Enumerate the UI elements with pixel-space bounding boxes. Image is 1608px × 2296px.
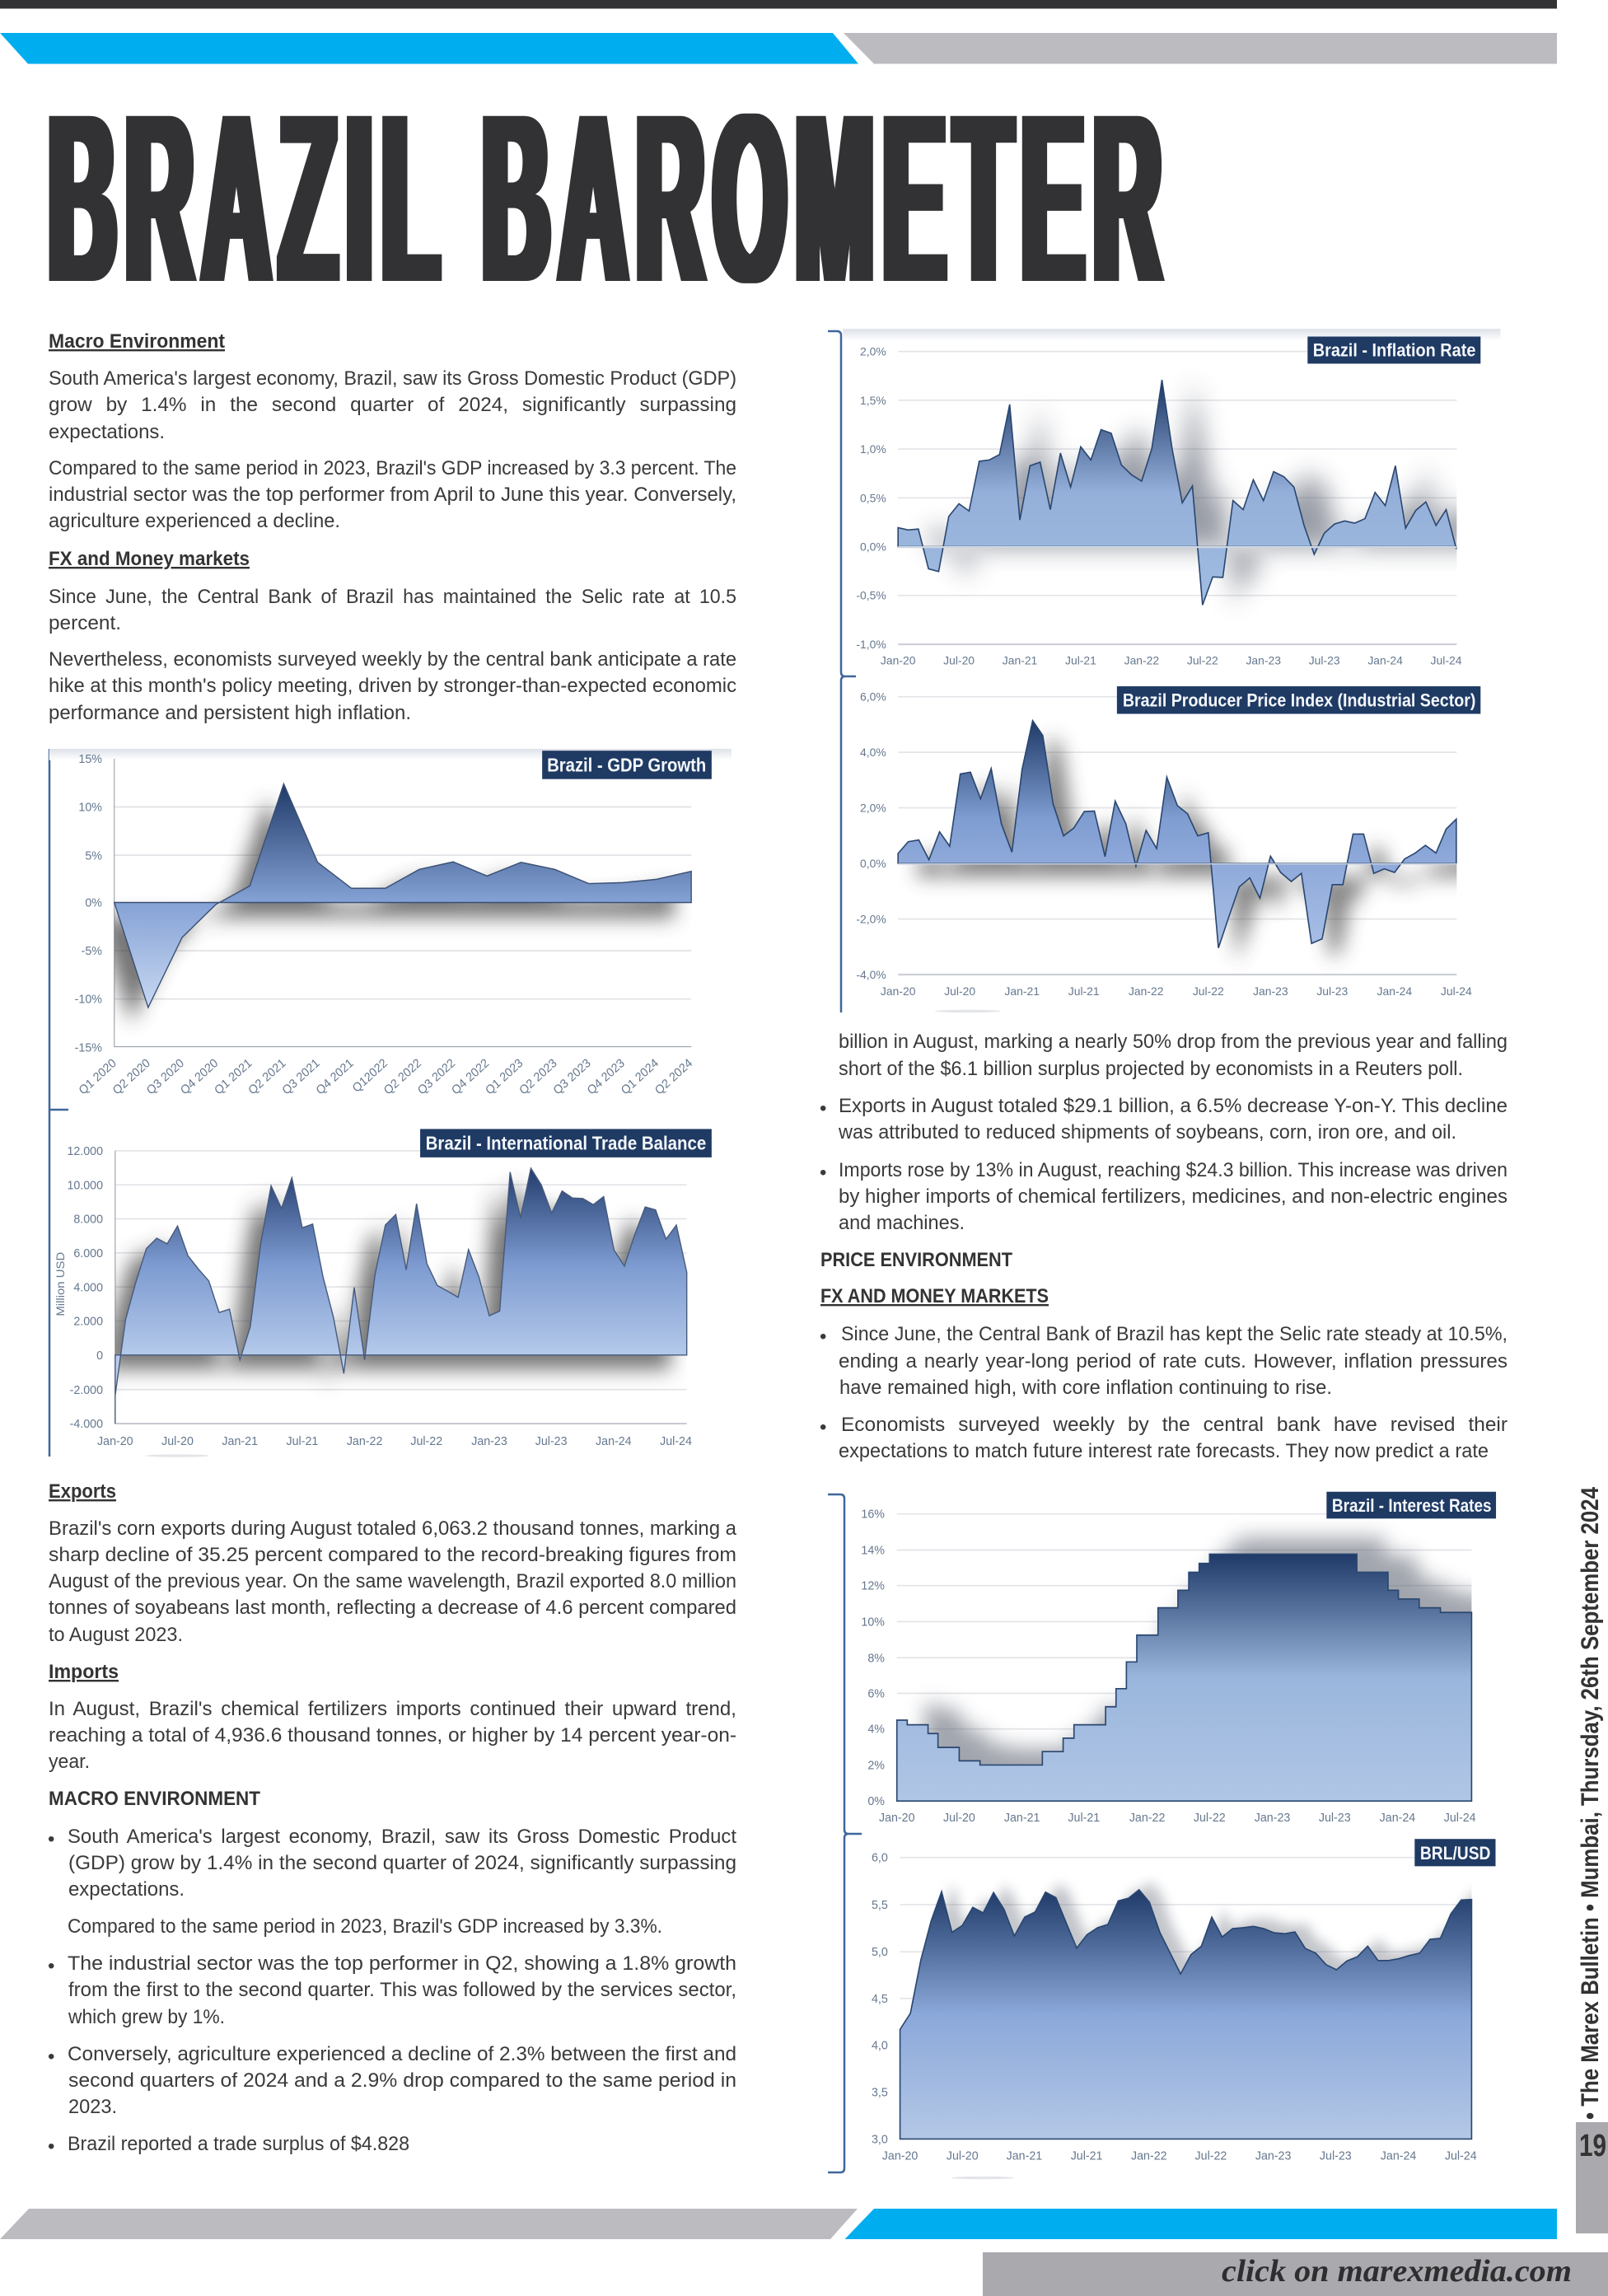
trade y axis labels: 0	[96, 1349, 103, 1363]
BRL x axis labels: Jul-21	[1071, 2150, 1102, 2163]
trade y axis title: Million USD	[54, 1252, 68, 1316]
GDP x axis labels	[77, 1057, 695, 1097]
inflation x axis labels: Jan-23	[1246, 654, 1281, 667]
trade x axis labels: Jan-24	[596, 1435, 632, 1448]
trade y axis labels: -2.000	[70, 1384, 103, 1397]
trade x axis labels: Jan-20	[97, 1435, 133, 1448]
right column text	[820, 1031, 1508, 1462]
GDP x axis labels: Q4 2021	[314, 1057, 357, 1097]
GDP y axis labels: -10%	[75, 993, 102, 1007]
interest x axis labels: Jan-23	[1255, 1812, 1290, 1825]
interest title badge: Brazil - Interest Rates	[1332, 1495, 1492, 1516]
bullet: selic rate	[820, 1323, 1508, 1399]
bullet: agriculture: 2023.	[68, 2096, 117, 2118]
bullet: exports: Exports in August totaled $29.1 billion, a 6.5% decrease Y-on-Y. This decline	[839, 1095, 1508, 1117]
heading: exports: Exports	[49, 1480, 116, 1503]
GDP x axis labels: Q3 2021	[280, 1057, 322, 1097]
paragraph: GDP growth: South America's largest economy, Brazil, saw its Gross Domestic Product (GDP)	[49, 367, 736, 390]
bullet: selic rate: have remained high, with core inflation continuing to rise.	[839, 1377, 1332, 1399]
paragraph: trade surplus continued: short of the $6.1 billion surplus projected by economists in a Reuters poll.	[839, 1058, 1463, 1080]
BRL title badge: BRL/USD	[1420, 1843, 1490, 1863]
bullet: selic rate: Since June, the Central Bank of Brazil has kept the Selic rate steady at 10.5%,	[841, 1323, 1508, 1345]
interest y axis labels: 14%	[861, 1544, 885, 1558]
bullet: industrial sector	[48, 1952, 736, 2028]
paragraph: exports: sharp decline of 35.25 percent compared to the record-breaking figures from	[49, 1544, 736, 1566]
interest y axis labels	[861, 1508, 885, 1808]
bullet: agriculture: •	[48, 2046, 54, 2068]
page number tab	[1576, 2122, 1608, 2233]
BRL x axis labels	[882, 2150, 1477, 2163]
paragraph: sector comparison: industrial sector was the top performer from April to June this year. Conversely,	[49, 484, 736, 506]
bullet: exports	[820, 1095, 1508, 1143]
paragraph: selic rate: percent.	[49, 612, 121, 634]
PPI y axis labels	[856, 690, 886, 981]
inflation x axis labels: Jul-22	[1187, 654, 1218, 667]
inflation x axis labels: Jul-20	[943, 654, 975, 667]
chart: inflation rate	[843, 329, 1500, 667]
bullet: industrial sector: which grew by 1%.	[68, 2006, 225, 2028]
paragraph: exports: Brazil's corn exports during August totaled 6,063.2 thousand tonnes, marking a	[49, 1517, 737, 1540]
trade area series	[115, 1168, 687, 1396]
BRL x axis labels: Jul-20	[947, 2150, 979, 2163]
paragraph: imports: year.	[49, 1751, 90, 1773]
bullet: economists: Economists surveyed weekly by the central bank have revised their	[841, 1414, 1508, 1436]
interest x axis labels: Jul-20	[943, 1812, 975, 1825]
side issue line: • The Marex Bulletin • Mumbai, Thursday, 26th September 2024	[1577, 1487, 1604, 2120]
BRL x axis labels: Jul-24	[1445, 2150, 1477, 2163]
BRL title badge	[1414, 1839, 1495, 1866]
interest x axis labels: Jul-24	[1444, 1812, 1476, 1825]
bullet: selic rate: ending a nearly year-long period of rate cuts. However, inflation pressures	[839, 1350, 1508, 1372]
interest x axis labels: Jan-24	[1380, 1812, 1415, 1825]
chart: international trade balance	[54, 1129, 712, 1457]
heading: FX and money markets: FX and Money markets	[49, 548, 250, 570]
BRL x axis labels: Jan-24	[1381, 2150, 1416, 2163]
interest x axis labels	[879, 1812, 1476, 1825]
bullet: GDP growth: expectations.	[68, 1878, 185, 1901]
trade x axis labels: Jul-24	[660, 1435, 692, 1448]
PPI y axis labels: 0,0%	[860, 857, 886, 870]
PPI area series	[898, 721, 1456, 948]
PPI x axis labels: Jan-24	[1377, 984, 1412, 998]
inflation y axis labels: 0,5%	[860, 491, 886, 504]
GDP x axis labels: Q2 2024	[652, 1057, 695, 1097]
inflation x axis labels: Jan-20	[881, 654, 916, 667]
GDP x axis labels: Q12022	[350, 1057, 390, 1096]
PPI x axis labels: Jan-21	[1004, 984, 1040, 998]
top grey ribbon	[844, 33, 1557, 64]
bullet: trade surplus: •	[48, 2135, 54, 2158]
trade y axis labels: 4.000	[73, 1281, 103, 1294]
paragraph: rate hike expectation	[49, 648, 736, 724]
GDP x axis labels: Q2 2023	[517, 1057, 559, 1097]
PPI y axis labels: 4,0%	[860, 746, 886, 759]
GDP y axis labels: 0%	[85, 896, 102, 910]
PPI y axis labels: 6,0%	[860, 690, 886, 704]
paragraph: GDP growth: grow by 1.4% in the second quarter of 2024, significantly surpassing	[49, 394, 736, 416]
inflation x axis labels: Jan-21	[1003, 654, 1037, 667]
trade y axis labels: 2.000	[73, 1315, 103, 1329]
PPI x axis labels: Jan-20	[881, 984, 916, 998]
PPI y axis labels: -4,0%	[856, 968, 886, 981]
bullet: imports: by higher imports of chemical fertilizers, medicines, and non-electric engines	[839, 1185, 1508, 1208]
trade x axis labels: Jan-22	[347, 1435, 382, 1448]
GDP y axis labels: -15%	[75, 1041, 102, 1054]
paragraph: sector comparison: Compared to the same period in 2023, Brazil's GDP increased by 3.3 percent. The	[49, 457, 736, 479]
inflation x axis labels: Jan-22	[1124, 654, 1159, 667]
bullet: exports: •	[820, 1097, 826, 1120]
heading: macro environment: Macro Environment	[49, 330, 225, 353]
paragraph: rate hike expectation: performance and persistent high inflation.	[49, 702, 411, 724]
PPI x axis labels: Jul-22	[1193, 984, 1224, 998]
BRL x axis labels: Jan-20	[882, 2150, 918, 2163]
trade y axis labels: 10.000	[67, 1179, 103, 1192]
BRL y axis labels: 5,5	[872, 1899, 888, 1912]
trade x axis labels: Jan-21	[222, 1435, 258, 1448]
top blue ribbon	[0, 33, 858, 64]
paragraph: GDP growth: expectations.	[49, 421, 165, 443]
GDP x axis labels: Q1 2021	[213, 1057, 255, 1097]
trade x axis labels: Jul-22	[410, 1435, 442, 1448]
GDP x axis labels: Q3 2020	[144, 1057, 187, 1097]
BRL y axis labels: 3,0	[872, 2133, 888, 2147]
paragraph: rate hike expectation: Nevertheless, economists surveyed weekly by the central bank anticipate a rate	[49, 648, 736, 671]
interest y axis labels: 4%	[867, 1723, 885, 1737]
paragraph: GDP growth	[49, 367, 736, 443]
paragraph: trade surplus continued: billion in August, marking a nearly 50% drop from the previous year and falling	[839, 1031, 1508, 1053]
BRL y axis labels	[872, 1852, 888, 2147]
BRL y axis labels: 4,5	[872, 1993, 888, 2006]
interest y axis labels: 6%	[867, 1687, 885, 1701]
footer link bar: click on marexmedia.com	[1222, 2254, 1572, 2289]
paragraph: rate hike expectation: hike at this month's policy meeting, driven by stronger-than-expected economic	[49, 675, 736, 697]
paragraph: exports	[49, 1517, 737, 1646]
footer link bar	[983, 2252, 1608, 2296]
trade y axis labels	[67, 1145, 103, 1431]
interest area series	[897, 1555, 1471, 1801]
interest y axis labels: 10%	[861, 1616, 885, 1630]
interest y axis labels: 12%	[861, 1580, 885, 1593]
interest x axis labels: Jul-23	[1319, 1812, 1351, 1825]
interest x axis labels: Jan-20	[879, 1812, 915, 1825]
BRL y axis labels: 3,5	[872, 2086, 888, 2099]
bullet: imports	[820, 1159, 1508, 1234]
bullet: industrial sector: The industrial sector was the top performer in Q2, showing a 1.8% growth	[68, 1952, 736, 1975]
PPI x axis labels: Jan-22	[1129, 984, 1164, 998]
chart: GDP growth	[49, 749, 732, 1097]
inflation x axis labels: Jul-21	[1065, 654, 1096, 667]
PPI title badge: Brazil Producer Price Index (Industrial Sector)	[1123, 690, 1475, 711]
trade x axis labels: Jul-21	[287, 1435, 318, 1448]
PPI y axis labels: -2,0%	[856, 912, 886, 926]
BRL x axis labels: Jan-23	[1255, 2150, 1291, 2163]
GDP x axis labels: Q2 2022	[381, 1057, 424, 1097]
GDP x axis labels: Q4 2022	[450, 1057, 492, 1097]
paragraph: imports: In August, Brazil's chemical fertilizers imports continued their upward trend,	[49, 1698, 736, 1720]
GDP y axis labels	[75, 753, 102, 1054]
GDP title badge	[542, 751, 712, 779]
bullet: economists	[820, 1414, 1508, 1462]
bullet: trade surplus: Brazil reported a trade surplus of $4.828	[68, 2133, 409, 2155]
top dark rule	[0, 0, 1557, 8]
bullet: imports: Imports rose by 13% in August, reaching $24.3 billion. This increase was driven	[839, 1159, 1508, 1181]
bullet: imports: and machines.	[839, 1212, 965, 1234]
trade y axis labels: 6.000	[73, 1247, 103, 1260]
inflation y axis labels: 1,0%	[860, 442, 886, 456]
interest x axis labels: Jul-22	[1194, 1812, 1226, 1825]
interest x axis labels: Jan-21	[1004, 1812, 1040, 1825]
paragraph: sector comparison: agriculture experienced a decline.	[49, 510, 340, 532]
bullet: GDP growth: •	[48, 1828, 54, 1850]
chart: BRL/USD	[872, 1839, 1495, 2179]
BRL x axis labels: Jul-22	[1195, 2150, 1227, 2163]
bullet: industrial sector: •	[48, 1955, 54, 1977]
trade y axis labels: 12.000	[67, 1145, 103, 1158]
interest title badge	[1326, 1492, 1496, 1518]
inflation y axis labels: 2,0%	[860, 344, 886, 358]
GDP y axis labels: -5%	[82, 945, 102, 958]
paragraph: trade surplus continued	[839, 1031, 1508, 1080]
BRL x axis labels: Jan-22	[1131, 2150, 1167, 2163]
inflation y axis labels: -0,5%	[856, 589, 886, 602]
bullet: economists: expectations to match future interest rate forecasts. They now predict a rate	[839, 1440, 1489, 1462]
heading: FX and money markets caps: FX AND MONEY MARKETS	[820, 1285, 1049, 1307]
GDP y axis labels: 10%	[78, 801, 102, 815]
trade x axis labels: Jan-23	[471, 1435, 507, 1448]
heading: macro environment caps: MACRO ENVIRONMENT	[49, 1788, 260, 1810]
interest y axis labels: 0%	[867, 1795, 885, 1808]
GDP x axis labels: Q1 2024	[619, 1057, 661, 1097]
bullet: agriculture: second quarters of 2024 and a 2.9% drop compared to the same period in	[68, 2069, 736, 2092]
GDP x axis labels: Q2 2021	[246, 1057, 288, 1097]
GDP x axis labels: Q4 2020	[178, 1057, 221, 1097]
GDP x axis labels: Q3 2022	[415, 1057, 458, 1097]
paragraph: selic rate: Since June, the Central Bank of Brazil has maintained the Selic rate at 10.5	[49, 586, 736, 608]
BRL y axis labels: 5,0	[872, 1946, 888, 1959]
bullet: agriculture: Conversely, agriculture experienced a decline of 2.3% between the first and	[68, 2043, 736, 2065]
PPI x axis labels: Jul-20	[944, 984, 975, 998]
bullet: GDP growth	[48, 1826, 736, 1901]
bullet: industrial sector: from the first to the second quarter. This was followed by the services sector,	[68, 1979, 736, 2001]
GDP title badge: Brazil - GDP Growth	[547, 755, 706, 776]
PPI x axis labels: Jul-21	[1068, 984, 1100, 998]
chart: producer price index	[856, 686, 1480, 1012]
trade x axis labels: Jul-20	[161, 1435, 194, 1448]
bullet: GDP growth: (GDP) grow by 1.4% in the second quarter of 2024, significantly surpassing	[68, 1852, 736, 1874]
paragraph: exports: tonnes of soyabeans last month, reflecting a decrease of 4.6 percent compared	[49, 1597, 736, 1619]
left chart bracket	[49, 749, 68, 1457]
trade y axis labels: -4.000	[70, 1418, 103, 1431]
GDP area series	[115, 783, 691, 1008]
PPI x axis labels	[881, 984, 1472, 998]
inflation x axis labels: Jan-24	[1367, 654, 1403, 667]
interest x axis labels: Jul-21	[1068, 1812, 1100, 1825]
BRL y axis labels: 6,0	[872, 1852, 888, 1865]
PPI y axis labels: 2,0%	[860, 801, 886, 815]
inflation x axis labels: Jul-24	[1431, 654, 1462, 667]
bullet: economists: •	[820, 1416, 826, 1438]
inflation y axis labels: 1,5%	[860, 394, 886, 407]
interest y axis labels: 2%	[867, 1759, 885, 1773]
BRL x axis labels: Jul-23	[1320, 2150, 1352, 2163]
trade x axis labels: Jul-23	[535, 1435, 568, 1448]
interest y axis labels: 8%	[867, 1652, 885, 1665]
interest y axis labels: 16%	[861, 1508, 885, 1522]
paragraph: selic rate	[49, 586, 736, 634]
GDP x axis labels: Q4 2023	[585, 1057, 628, 1097]
paragraph: GDP comparison: Compared to the same period in 2023, Brazil's GDP increased by 3.3%.	[68, 1915, 662, 1938]
left column text: macro environment	[49, 330, 736, 724]
PPI x axis labels: Jan-23	[1253, 984, 1288, 998]
bottom grey ribbon	[0, 2209, 858, 2239]
paragraph: exports: to August 2023.	[49, 1624, 183, 1646]
inflation y axis labels: 0,0%	[860, 540, 886, 554]
bullet: exports: was attributed to reduced shipments of soybeans, corn, iron ore, and oil.	[838, 1121, 1456, 1143]
BRL y axis labels: 4,0	[872, 2039, 888, 2053]
PPI x axis labels: Jul-23	[1316, 984, 1348, 998]
GDP x axis labels: Q3 2023	[551, 1057, 594, 1097]
right upper chart bracket	[828, 331, 856, 1012]
trade title badge: Brazil - International Trade Balance	[426, 1133, 706, 1154]
paragraph: exports: August of the previous year. On the same wavelength, Brazil exported 8.0 million	[49, 1570, 736, 1592]
GDP x axis labels: Q1 2020	[77, 1057, 119, 1097]
GDP y axis labels: 15%	[78, 753, 102, 766]
inflation x axis labels: Jul-23	[1309, 654, 1340, 667]
bullet: selic rate: •	[820, 1326, 826, 1348]
inflation y axis labels	[856, 344, 886, 651]
bullet: imports: •	[820, 1162, 826, 1184]
inflation y axis labels: -1,0%	[856, 638, 886, 651]
heading: imports: Imports	[49, 1661, 119, 1683]
inflation area series	[898, 380, 1456, 605]
chart: interest rates	[861, 1492, 1499, 1825]
BRL x axis labels: Jan-21	[1007, 2150, 1042, 2163]
bullet: GDP growth: South America's largest economy, Brazil, saw its Gross Domestic Product	[68, 1826, 736, 1848]
interest x axis labels: Jan-22	[1129, 1812, 1165, 1825]
GDP y axis labels: 5%	[85, 849, 102, 863]
GDP x axis labels: Q2 2020	[110, 1057, 153, 1097]
paragraph: imports: reaching a total of 4,936.6 thousand tonnes, or higher by 14 percent year-on-	[49, 1724, 736, 1747]
inflation title badge: Brazil - Inflation Rate	[1313, 339, 1475, 361]
heading: price environment: PRICE ENVIRONMENT	[820, 1249, 1012, 1271]
PPI x axis labels: Jul-24	[1441, 984, 1472, 998]
left column text: exports, imports, macro	[48, 1480, 737, 2158]
paragraph: sector comparison	[49, 457, 736, 532]
paragraph: imports	[49, 1698, 736, 1773]
right lower chart bracket	[828, 1494, 862, 2172]
bottom blue ribbon	[845, 2209, 1557, 2239]
BRL area series	[900, 1890, 1471, 2139]
trade x axis labels	[97, 1435, 692, 1448]
bullet: agriculture	[48, 2043, 736, 2118]
GDP x axis labels: Q1 2023	[484, 1057, 526, 1097]
trade y axis labels: 8.000	[73, 1213, 103, 1227]
inflation x axis labels	[881, 654, 1462, 667]
